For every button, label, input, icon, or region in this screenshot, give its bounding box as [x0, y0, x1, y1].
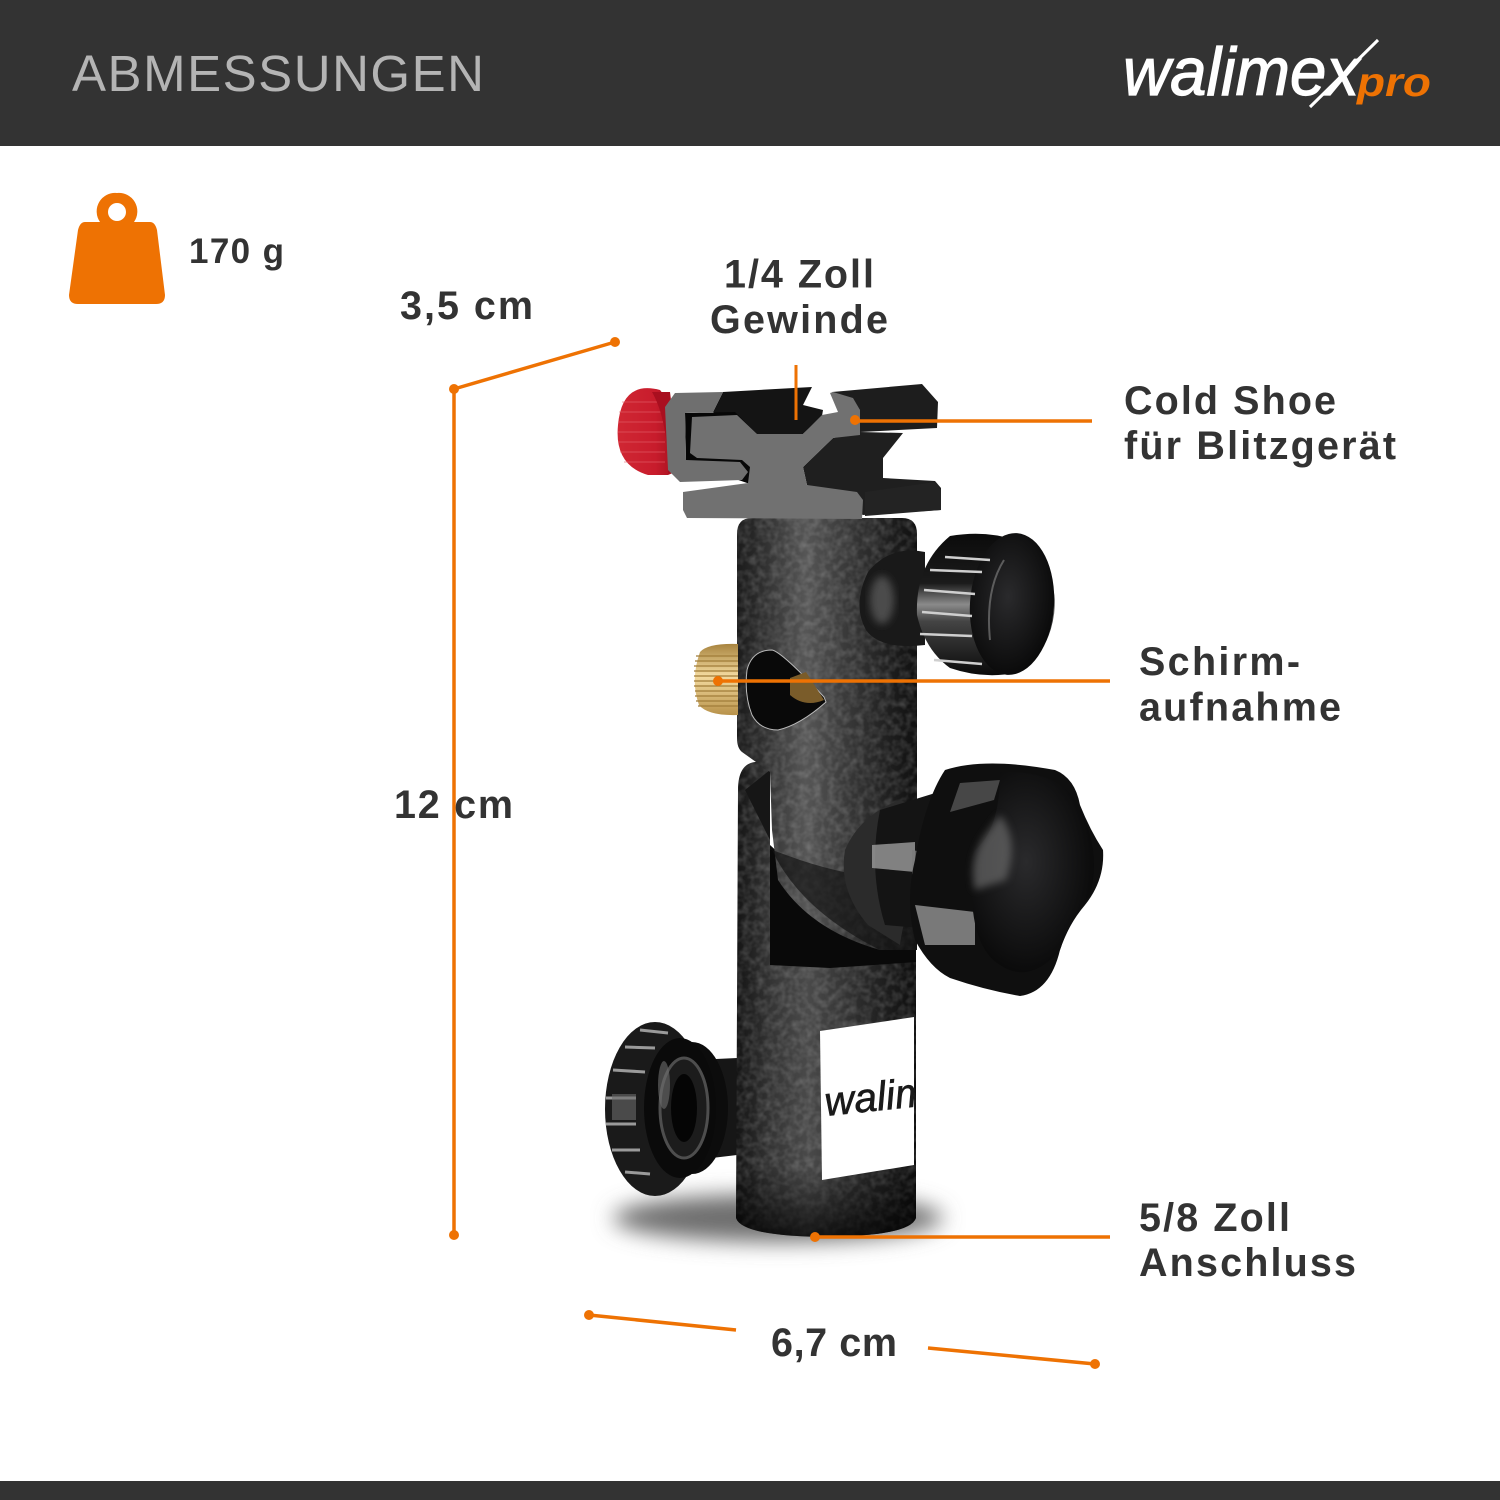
upper knob — [859, 530, 1059, 678]
label on cylinder — [820, 1017, 914, 1180]
large locking knob — [844, 764, 1103, 996]
callout: 5/8 Zoll Anschluss — [810, 1196, 1356, 1285]
ground shadow — [613, 1194, 943, 1242]
callout: Cold Shoe: für Blitzgerät — [1124, 424, 1396, 468]
callout: Cold Shoe — [850, 379, 1396, 468]
cold shoe plate — [618, 384, 941, 519]
value: 6,7 cm — [771, 1321, 897, 1365]
upper cylinder body — [737, 518, 917, 950]
heading: ABMESSUNGEN — [72, 45, 484, 102]
footer bar — [0, 1481, 1500, 1500]
brass thumb screw — [694, 644, 738, 715]
callout: 5/8 Zoll Anschluss: 5/8 Zoll — [1139, 1196, 1290, 1240]
weight value: 170 g — [189, 232, 284, 271]
product photo: umbrella swivel holder — [605, 384, 1103, 1242]
logo: walimex pro: pro — [1356, 59, 1431, 105]
callout: Schirmaufnahme — [713, 640, 1341, 730]
icon: weight — [69, 193, 165, 304]
lower left knob — [605, 1022, 737, 1196]
lower cylinder — [736, 762, 916, 1237]
value: 12 cm — [394, 783, 513, 827]
label on cylinder: walimex — [822, 1064, 976, 1125]
umbrella hole — [746, 650, 826, 730]
logo: walimex pro: walimex — [1123, 34, 1361, 110]
dimension: depth 3,5 cm — [400, 284, 620, 389]
callout: Schirmaufnahme: Schirm- — [1139, 640, 1300, 684]
dimension: width 6,7 cm — [584, 1310, 1100, 1369]
callout: 1/4 Zoll Gewinde: Gewinde — [710, 298, 888, 342]
callout: 1/4 Zoll Gewinde: 1/4 Zoll — [724, 252, 874, 296]
dimension: height 12 cm — [394, 384, 513, 1240]
callout: 1/4 Zoll Gewinde — [710, 252, 888, 420]
callout: Schirmaufnahme: aufnahme — [1139, 686, 1341, 730]
callout: Cold Shoe: Cold Shoe — [1124, 379, 1336, 423]
red locking screw — [618, 388, 680, 475]
header bar — [0, 0, 1500, 146]
value: 3,5 cm — [400, 284, 533, 328]
callout: 5/8 Zoll Anschluss: Anschluss — [1139, 1241, 1356, 1285]
